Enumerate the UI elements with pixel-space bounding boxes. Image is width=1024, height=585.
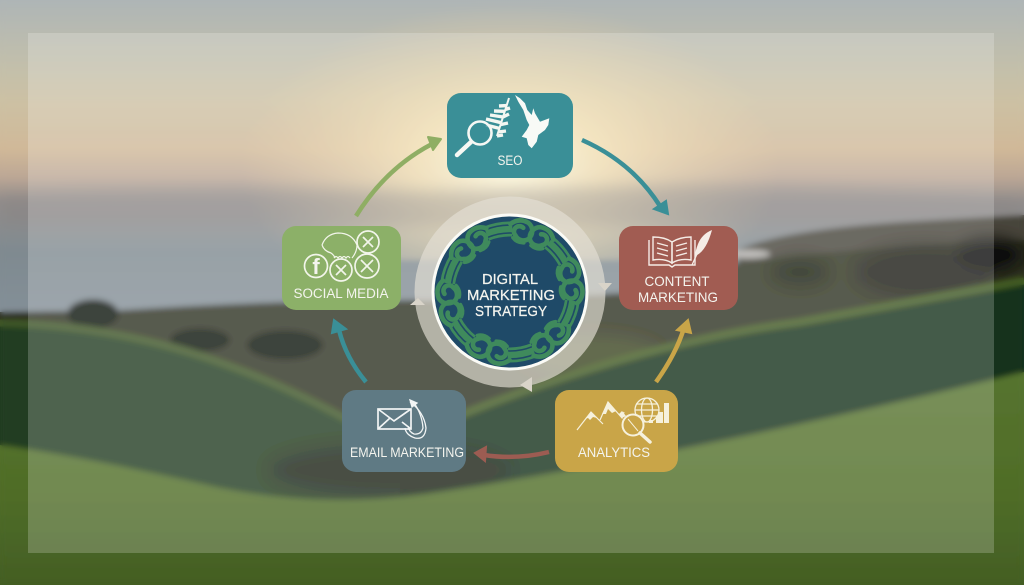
card: content marketing bbox=[619, 226, 738, 310]
label: EMAIL MARKETING bbox=[350, 445, 464, 460]
icon: bar chart bbox=[649, 403, 669, 423]
arrow: social media to SEO bbox=[356, 137, 441, 216]
label bbox=[638, 273, 718, 305]
icon: magnifier bbox=[457, 122, 492, 155]
koru pattern bbox=[434, 218, 586, 366]
arrow: analytics to email marketing bbox=[475, 447, 549, 461]
icon: north island map bbox=[515, 95, 549, 148]
card: SEO bbox=[447, 93, 573, 178]
icon: magnifier bbox=[622, 414, 650, 442]
icon: kiwi and social circles bbox=[304, 231, 379, 281]
icon: f letter: f bbox=[312, 254, 320, 279]
hub title: MARKETING bbox=[467, 287, 555, 304]
icon: envelope bbox=[378, 409, 411, 429]
outer ring bbox=[424, 206, 596, 378]
arrow: analytics to content marketing bbox=[656, 320, 691, 382]
hub title bbox=[467, 271, 555, 320]
icon: fish hook bbox=[405, 400, 426, 438]
label: SOCIAL MEDIA bbox=[294, 286, 388, 301]
icon: fern bbox=[486, 98, 510, 136]
icon: globe bbox=[635, 398, 659, 422]
label: SEO bbox=[498, 153, 522, 168]
navy disc bbox=[433, 215, 587, 369]
card: analytics bbox=[555, 390, 678, 472]
label: MARKETING bbox=[638, 289, 718, 305]
arrow: SEO to content marketing bbox=[582, 140, 668, 214]
label: ANALYTICS bbox=[578, 444, 650, 460]
arrow: email marketing to social media bbox=[332, 320, 366, 382]
hub title: DIGITAL bbox=[482, 271, 538, 288]
icon: open book bbox=[649, 237, 695, 267]
icon: quill bbox=[692, 230, 712, 265]
label: CONTENT bbox=[644, 273, 710, 289]
card: email marketing bbox=[342, 390, 466, 472]
centre hub bbox=[410, 206, 612, 392]
card: social media bbox=[282, 226, 401, 310]
icon: mountains bbox=[577, 402, 626, 430]
ring arrowheads bbox=[410, 283, 612, 392]
hub title: STRATEGY bbox=[475, 303, 547, 320]
